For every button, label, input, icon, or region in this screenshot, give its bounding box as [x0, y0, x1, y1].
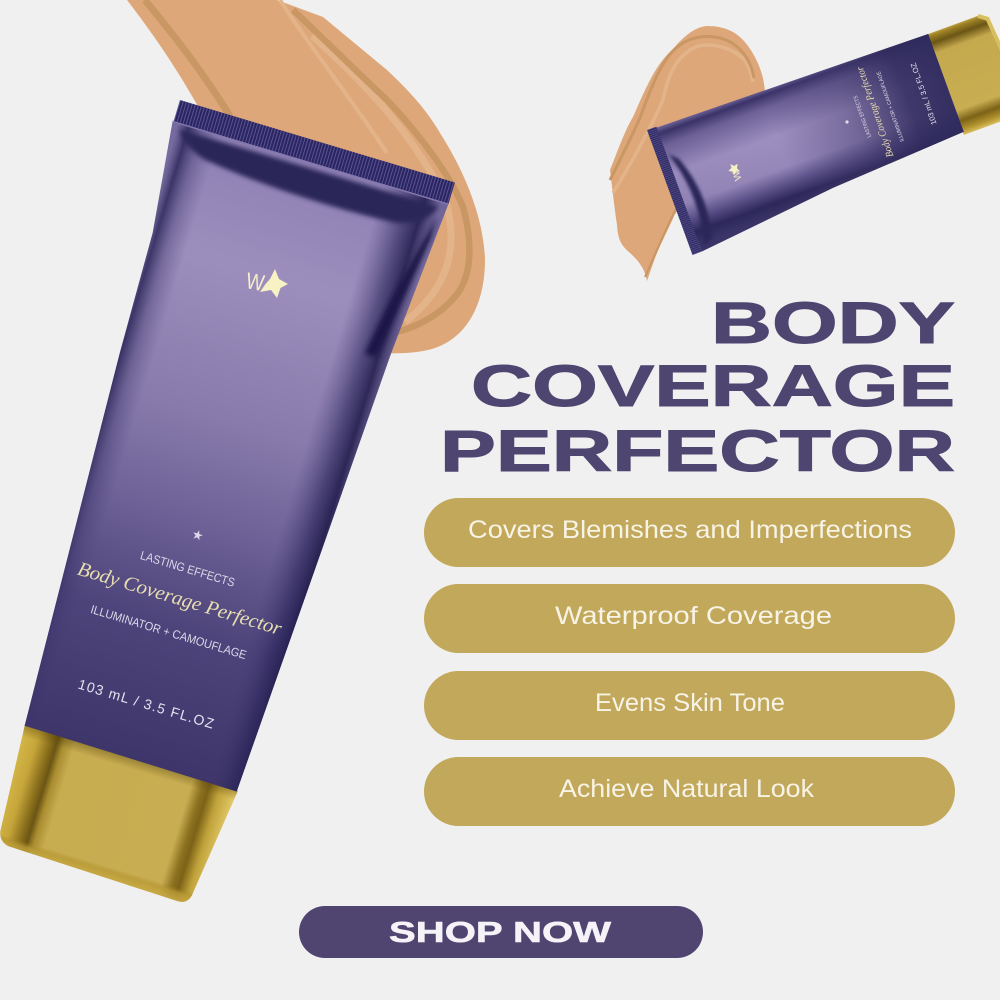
small product tube — [647, 5, 1000, 255]
title line 2: COVERAGE — [471, 354, 955, 419]
shop now button — [299, 906, 703, 958]
small tube body — [655, 29, 972, 252]
benefit pill 2: Waterproof Coverage — [555, 602, 832, 630]
title — [440, 291, 955, 484]
small tube logo: W — [731, 169, 744, 182]
title line 3: PERFECTOR — [440, 419, 955, 484]
small tube star — [845, 120, 849, 124]
benefit pill 4: Achieve Natural Look — [559, 775, 815, 803]
title line 1: BODY — [711, 291, 955, 356]
crimp highlight — [172, 121, 449, 205]
small label: lasting effects: LASTING EFFECTS — [853, 94, 873, 138]
label: illuminator: ILLUMINATOR + CAMOUFLAGE — [89, 602, 248, 662]
label: lasting effects: LASTING EFFECTS — [139, 548, 237, 590]
benefit pill 1 — [424, 498, 955, 567]
large foundation swatch — [127, 0, 485, 353]
label: product name: Body Coverage Perfector — [75, 558, 285, 640]
small tube logo — [727, 161, 744, 182]
small label: product name: Body Coverage Perfector — [855, 64, 896, 159]
star mark: ★ — [190, 526, 205, 544]
benefit pill 2 — [424, 584, 955, 653]
tube cap — [0, 725, 239, 909]
small foundation swatch — [610, 26, 765, 281]
label: size: 103 mL / 3.5 FL.OZ — [76, 676, 216, 732]
small label: size: 103 mL / 3.5 FL.OZ — [909, 61, 938, 126]
large product tube — [0, 100, 455, 918]
benefit pill 4 — [424, 757, 955, 826]
benefit pill 3 — [424, 671, 955, 740]
benefit pill 1: Covers Blemishes and Imperfections — [468, 516, 912, 544]
small tube crimp — [647, 127, 702, 255]
large tube logo — [244, 267, 288, 298]
tube body — [0, 121, 449, 801]
small label: illuminator: ILLUMINATOR + CAMOUFLAGE — [876, 70, 906, 142]
small tube cap — [927, 10, 1000, 135]
tube crimp — [173, 100, 455, 205]
large tube logo: W — [244, 267, 267, 296]
shop now button: SHOP NOW — [389, 917, 612, 949]
benefit pill 3: Evens Skin Tone — [595, 689, 785, 717]
